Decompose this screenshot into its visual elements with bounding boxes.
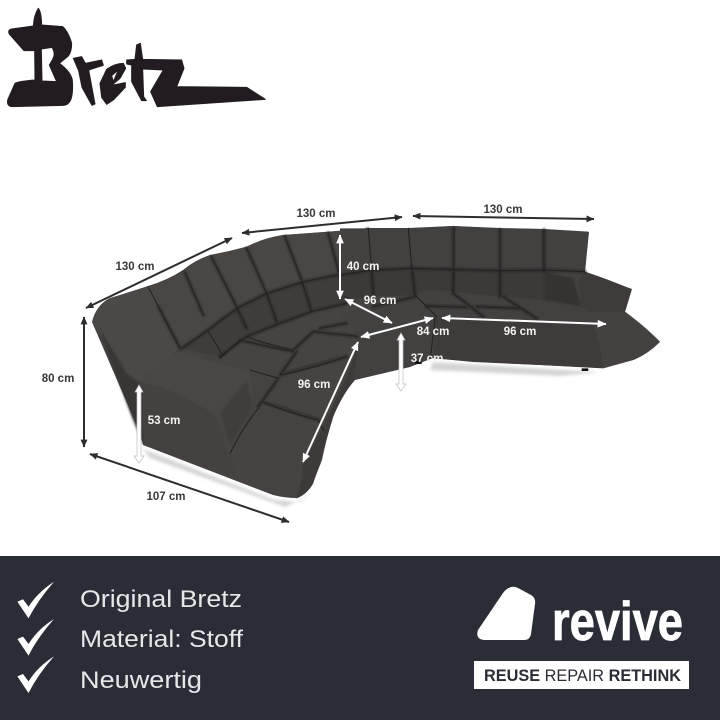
- front arm cushion: [138, 352, 254, 455]
- right sections, traced at zoom scale: [340, 226, 660, 380]
- front seat cushion: [230, 408, 325, 498]
- arm right shade: [544, 272, 582, 307]
- back cushions left: [148, 228, 380, 348]
- footer band: [0, 556, 720, 720]
- dimension labels: 130 cm: [483, 204, 523, 216]
- tagline: REUSE REPAIR RETHINK: [484, 666, 682, 685]
- seam shading: [158, 229, 380, 420]
- sofa silhouette: [92, 226, 660, 498]
- tagline box: [474, 661, 689, 689]
- seams right: [340, 228, 585, 357]
- sofa feet: [415, 361, 588, 371]
- arm fold shading: [220, 380, 253, 447]
- dimension arrows: black: [84, 216, 594, 522]
- checklist: [17, 582, 243, 694]
- revive logo: [474, 587, 689, 689]
- dimension labels: 84 cm: [417, 326, 449, 338]
- dimension labels: 53 cm: [148, 415, 180, 427]
- arrow: seat height 37 cm: [396, 333, 406, 391]
- dimension labels: 96 cm: [504, 326, 536, 338]
- arm right: [578, 272, 632, 312]
- pillow right: [588, 312, 660, 368]
- dimension labels: 37 cm: [411, 353, 443, 365]
- check icon 3: [17, 656, 54, 693]
- item: Original Bretz: Original Bretz: [80, 586, 242, 613]
- seat cushions right: [415, 290, 603, 323]
- seam shading right: [340, 228, 585, 318]
- arrow: seat height 53 cm: [134, 385, 144, 463]
- logo mark: [477, 587, 535, 640]
- dimension labels: 107 cm: [146, 491, 186, 503]
- dimension labels: 40 cm: [347, 261, 379, 273]
- dimension labels: 96 cm: [364, 295, 396, 307]
- lower back cushions: [182, 272, 380, 357]
- left arm end: [93, 287, 180, 382]
- logo: Bretz: [7, 8, 265, 107]
- dimension labels: [42, 204, 536, 503]
- sofa: [92, 226, 660, 507]
- lower back cushions right: [340, 269, 544, 300]
- seat side band: [297, 333, 380, 498]
- check icon 2: [17, 619, 54, 656]
- arm lower body: [138, 382, 297, 498]
- front band right: [433, 318, 603, 368]
- item: Material: Stoff: Material: Stoff: [80, 626, 243, 653]
- check icon 1: [17, 582, 54, 618]
- dimension arrows: white: [303, 235, 606, 462]
- dimension labels: 130 cm: [115, 261, 155, 273]
- wordmark: revive: [552, 590, 683, 652]
- left sections, traced at zoom scale: [93, 228, 380, 498]
- seams: [148, 229, 380, 453]
- floor shadow: [143, 362, 600, 507]
- item: Neuwertig: Neuwertig: [80, 667, 202, 694]
- dimension labels: 80 cm: [42, 373, 74, 385]
- seat cushions left: [220, 300, 380, 427]
- dimension labels: 96 cm: [298, 379, 330, 391]
- seat corner cushion: [340, 297, 437, 380]
- dimension labels: 130 cm: [296, 208, 336, 220]
- back cushions right: [340, 226, 588, 275]
